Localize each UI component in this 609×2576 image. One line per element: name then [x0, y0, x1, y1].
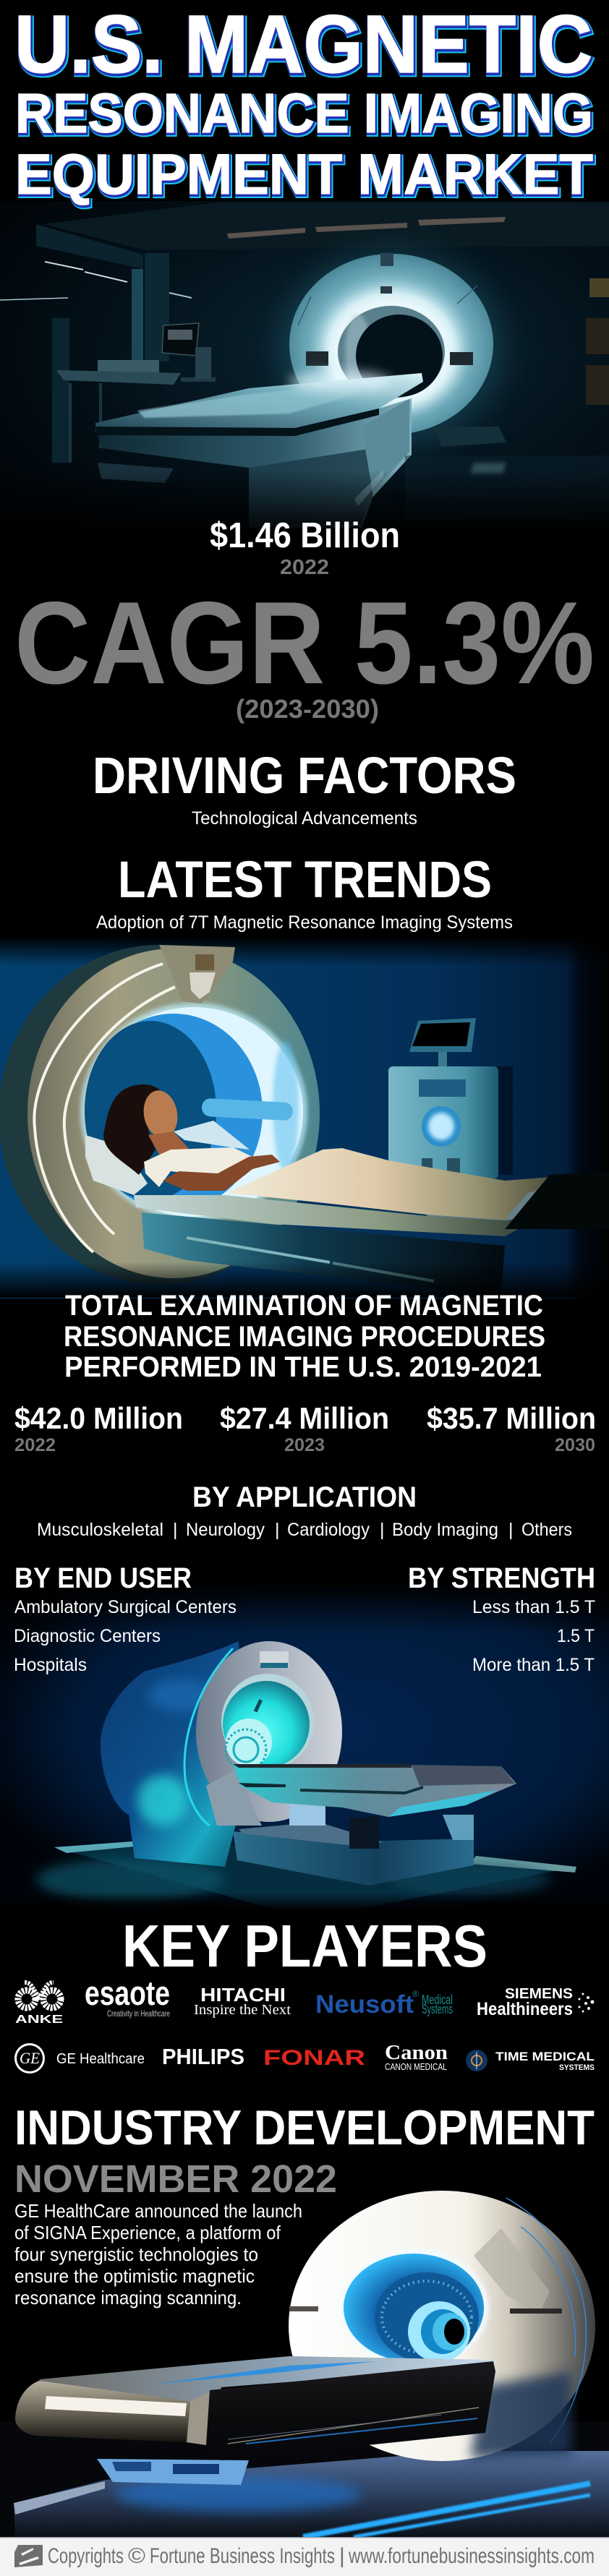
monitor and cart: [56, 323, 216, 483]
footer logo: [14, 2545, 43, 2567]
description: four synergistic technologies to: [14, 2243, 258, 2265]
logo: Hitachi: Inspire the Next: [194, 2002, 291, 2018]
stat: 2022: $42.0 Million: [14, 1401, 183, 1435]
application list: |: [173, 1520, 178, 1540]
control console: [388, 1066, 513, 1178]
logo: Neusoft: [315, 1989, 453, 2019]
body: Adoption of 7T Magnetic Resonance Imaging Systems: [96, 912, 513, 933]
end user list: Diagnostic Centers: [14, 1626, 161, 1646]
section: driving factors: [93, 748, 516, 829]
logo: ANKE: ANKE: [15, 2014, 63, 2026]
end user list: Ambulatory Surgical Centers: [14, 1597, 237, 1617]
end user list: [14, 1597, 237, 1675]
heading: TOTAL EXAMINATION OF MAGNETIC: [65, 1290, 543, 1322]
stat: 2030: 2030: [555, 1435, 595, 1455]
heading: DRIVING FACTORS: [93, 748, 516, 805]
stat: 2030: $35.7 Million: [427, 1401, 596, 1435]
description: [14, 2200, 302, 2308]
copyright text: |: [339, 2544, 345, 2568]
application list: Others: [521, 1520, 572, 1540]
patient: [85, 1084, 609, 1296]
heading: RESONANCE IMAGING PROCEDURES: [64, 1321, 545, 1353]
logo: Neusoft: ®: [412, 1989, 419, 1999]
patient table: [95, 372, 423, 528]
title line 3: EQUIPMENT MARKET: [16, 143, 594, 207]
application list: |: [275, 1520, 279, 1540]
monitor: [409, 1018, 476, 1066]
logo: Time Medical: TIME MEDICAL: [495, 2050, 595, 2063]
logo: esaote: esaote: [85, 1974, 170, 2012]
logo: Time Medical: [466, 2050, 595, 2072]
market size stat: [210, 516, 400, 579]
heading: BY END USER: [14, 1562, 192, 1594]
section: key players: [14, 1912, 595, 2074]
description: ensure the optimistic magnetic: [14, 2265, 255, 2287]
illustration: patient in MRI: [0, 937, 609, 1298]
end user list: Hospitals: [14, 1655, 87, 1675]
scanner ring: [0, 945, 320, 1285]
stat: 2023: $27.4 Million: [220, 1401, 389, 1435]
MRI ring: [279, 250, 506, 447]
copyright text: Copyrights: [48, 2544, 124, 2568]
title line 3: EQUIPMENT MARKET: [17, 144, 595, 208]
logo: Canon: CANON MEDICAL: [385, 2061, 447, 2072]
logo: GE Healthcare: [14, 2043, 145, 2074]
heading: LATEST TRENDS: [118, 852, 492, 909]
application list: Body Imaging: [392, 1520, 498, 1540]
section: industry development: [14, 2100, 595, 2308]
logo: Fonar: FONAR: [263, 2046, 365, 2070]
strength list: 1.5 T: [557, 1626, 595, 1646]
application list: |: [508, 1520, 514, 1540]
section: latest trends: [96, 852, 513, 933]
description: resonance imaging scanning.: [14, 2287, 242, 2308]
logo: Neusoft: Neusoft: [315, 1990, 414, 2019]
logo: Philips: PHILIPS: [162, 2044, 244, 2069]
logo: Canon: Canon: [385, 2041, 448, 2064]
strength list: [472, 1597, 595, 1675]
logo: Neusoft: Medical: [422, 1993, 453, 2007]
section: by strength: [408, 1562, 595, 1675]
application list: Neurology: [186, 1520, 265, 1540]
platform: [14, 2451, 609, 2538]
logo: Time Medical: SYSTEMS: [559, 2063, 595, 2072]
body: Technological Advancements: [192, 808, 417, 829]
stat: 2030: [427, 1401, 596, 1455]
title: [14, 0, 595, 208]
application list: [37, 1520, 572, 1540]
stat: 2022: [14, 1401, 183, 1455]
market value: $1.46 Billion: [210, 516, 400, 555]
heading: PERFORMED IN THE U.S. 2019-2021: [64, 1351, 542, 1383]
logo: GE Healthcare: GE: [20, 2049, 41, 2067]
heading: BY APPLICATION: [192, 1481, 417, 1513]
footer: [0, 2537, 609, 2576]
date: NOVEMBER 2022: [14, 2157, 337, 2201]
heading: BY STRENGTH: [408, 1562, 595, 1594]
logo: Hitachi: HITACHI: [200, 1984, 286, 2006]
heading: [64, 1290, 545, 1383]
description: of SIGNA Experience, a platform of: [14, 2222, 281, 2243]
table and pedestal: [233, 1764, 516, 1886]
scanner: [101, 1641, 342, 1867]
illustration: dark MRI room: [0, 201, 609, 535]
logo: esaote: [85, 1974, 170, 2019]
scanner body: [289, 2191, 595, 2461]
section: by application: [37, 1481, 572, 1540]
logo: Neusoft: Systems: [422, 2002, 453, 2016]
logo: GE Healthcare: GE Healthcare: [56, 2051, 145, 2067]
stat: 2023: 2023: [284, 1435, 325, 1455]
strength list: Less than 1.5 T: [472, 1597, 595, 1617]
application list: Musculoskeletal: [37, 1520, 163, 1540]
logo: ANKE: [15, 1982, 63, 2026]
logo: Hitachi: [194, 1984, 291, 2018]
stat: 2022: 2022: [14, 1435, 56, 1455]
illustration: white MRI scanner: [0, 2191, 609, 2538]
logo: Siemens Healthineers: SIEMENS: [505, 1986, 573, 2002]
application list: Cardiology: [287, 1520, 370, 1540]
CAGR period: (2023-2030): [236, 694, 379, 724]
CAGR stat: [14, 578, 595, 724]
stat: 2023: [220, 1401, 389, 1455]
floor plate: [36, 1841, 576, 1909]
application list: |: [380, 1520, 385, 1540]
logo: Siemens Healthineers: [477, 1986, 595, 2019]
copyright text: Fortune Business Insights: [150, 2544, 335, 2568]
section: total examination: [14, 1290, 596, 1455]
description: GE HealthCare announced the launch: [14, 2200, 302, 2222]
logo: Siemens Healthineers: Healthineers: [477, 1999, 573, 2019]
copyright text: ©: [128, 2544, 145, 2568]
heading: KEY PLAYERS: [122, 1912, 487, 1980]
strength list: More than 1.5 T: [472, 1655, 595, 1675]
title line 3: EQUIPMENT MARKET: [15, 142, 593, 206]
logo: esaote: Creativity in Healthcare: [107, 2008, 170, 2019]
copyright text: [48, 2544, 595, 2568]
illustration: MRI with cyan bore: [0, 1583, 609, 1911]
table: [15, 2356, 495, 2460]
section: by end user: [14, 1562, 237, 1675]
market year: 2022: [280, 556, 329, 579]
